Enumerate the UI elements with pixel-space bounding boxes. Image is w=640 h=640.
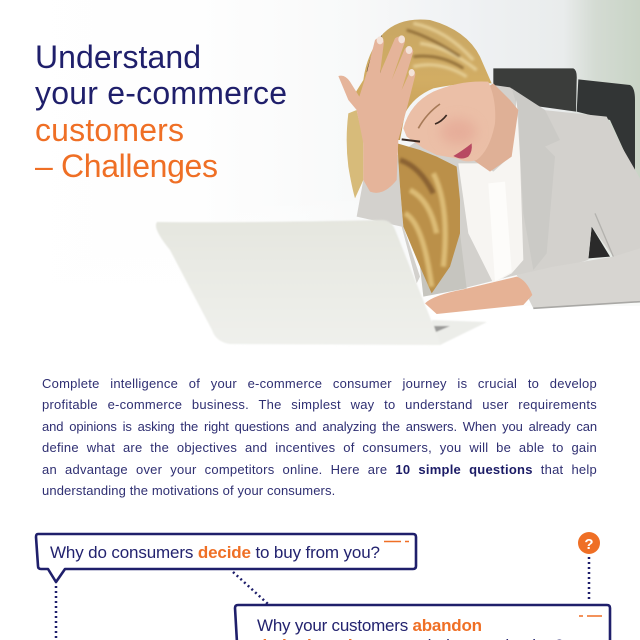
- icon: question mark: [578, 532, 600, 554]
- speech bubble: abandon: [235, 605, 610, 640]
- woman and chair: [338, 19, 640, 314]
- title: [35, 39, 287, 184]
- neck: [467, 83, 518, 172]
- title: your e-commerce: [35, 75, 287, 111]
- text: and opinions is asking the right questions and analyzing the answers. When you already can: [42, 419, 597, 434]
- text: understanding the motivations of your consumers.: [42, 483, 335, 498]
- hair lower: [397, 143, 460, 293]
- hand on desk: [425, 277, 532, 314]
- hero photo: stressed woman at laptop: [156, 0, 640, 345]
- speech bubble: decide: [36, 534, 416, 582]
- desk: [0, 306, 640, 370]
- speech bubble: abandon: Why your customers abandon: [257, 616, 482, 635]
- suit jacket: [357, 85, 640, 288]
- jacket sleeve: [517, 248, 640, 308]
- chair: [493, 68, 635, 258]
- hair upper: [355, 19, 492, 140]
- raised hand: [338, 35, 415, 193]
- shirt: [458, 100, 523, 283]
- lower torso under hair: [420, 233, 467, 297]
- text: define what are the objectives and incentives of consumers, you will be able to gain: [42, 440, 597, 455]
- hair left lock: [347, 110, 363, 198]
- text: an advantage over your competitors online. Here are 10 simple questions that help: [42, 462, 597, 477]
- blurred office background: [0, 0, 640, 320]
- title: customers: [35, 112, 184, 148]
- face: [402, 81, 495, 161]
- speech bubble: decide: Why do consumers decide to buy from you?: [50, 543, 380, 562]
- lapel: [512, 88, 560, 270]
- question diagram: [34, 532, 612, 640]
- laptop: [156, 220, 487, 345]
- dotted connectors: [56, 557, 589, 640]
- text: profitable e-commerce business. The simplest way to understand user requirements: [42, 397, 597, 412]
- icon: question mark: ?: [584, 536, 594, 553]
- title: Understand: [35, 39, 201, 75]
- intro paragraph: [42, 376, 597, 498]
- text: Complete intelligence of your e-commerce consumer journey is crucial to develop: [42, 376, 597, 391]
- title: – Challenges: [35, 148, 218, 184]
